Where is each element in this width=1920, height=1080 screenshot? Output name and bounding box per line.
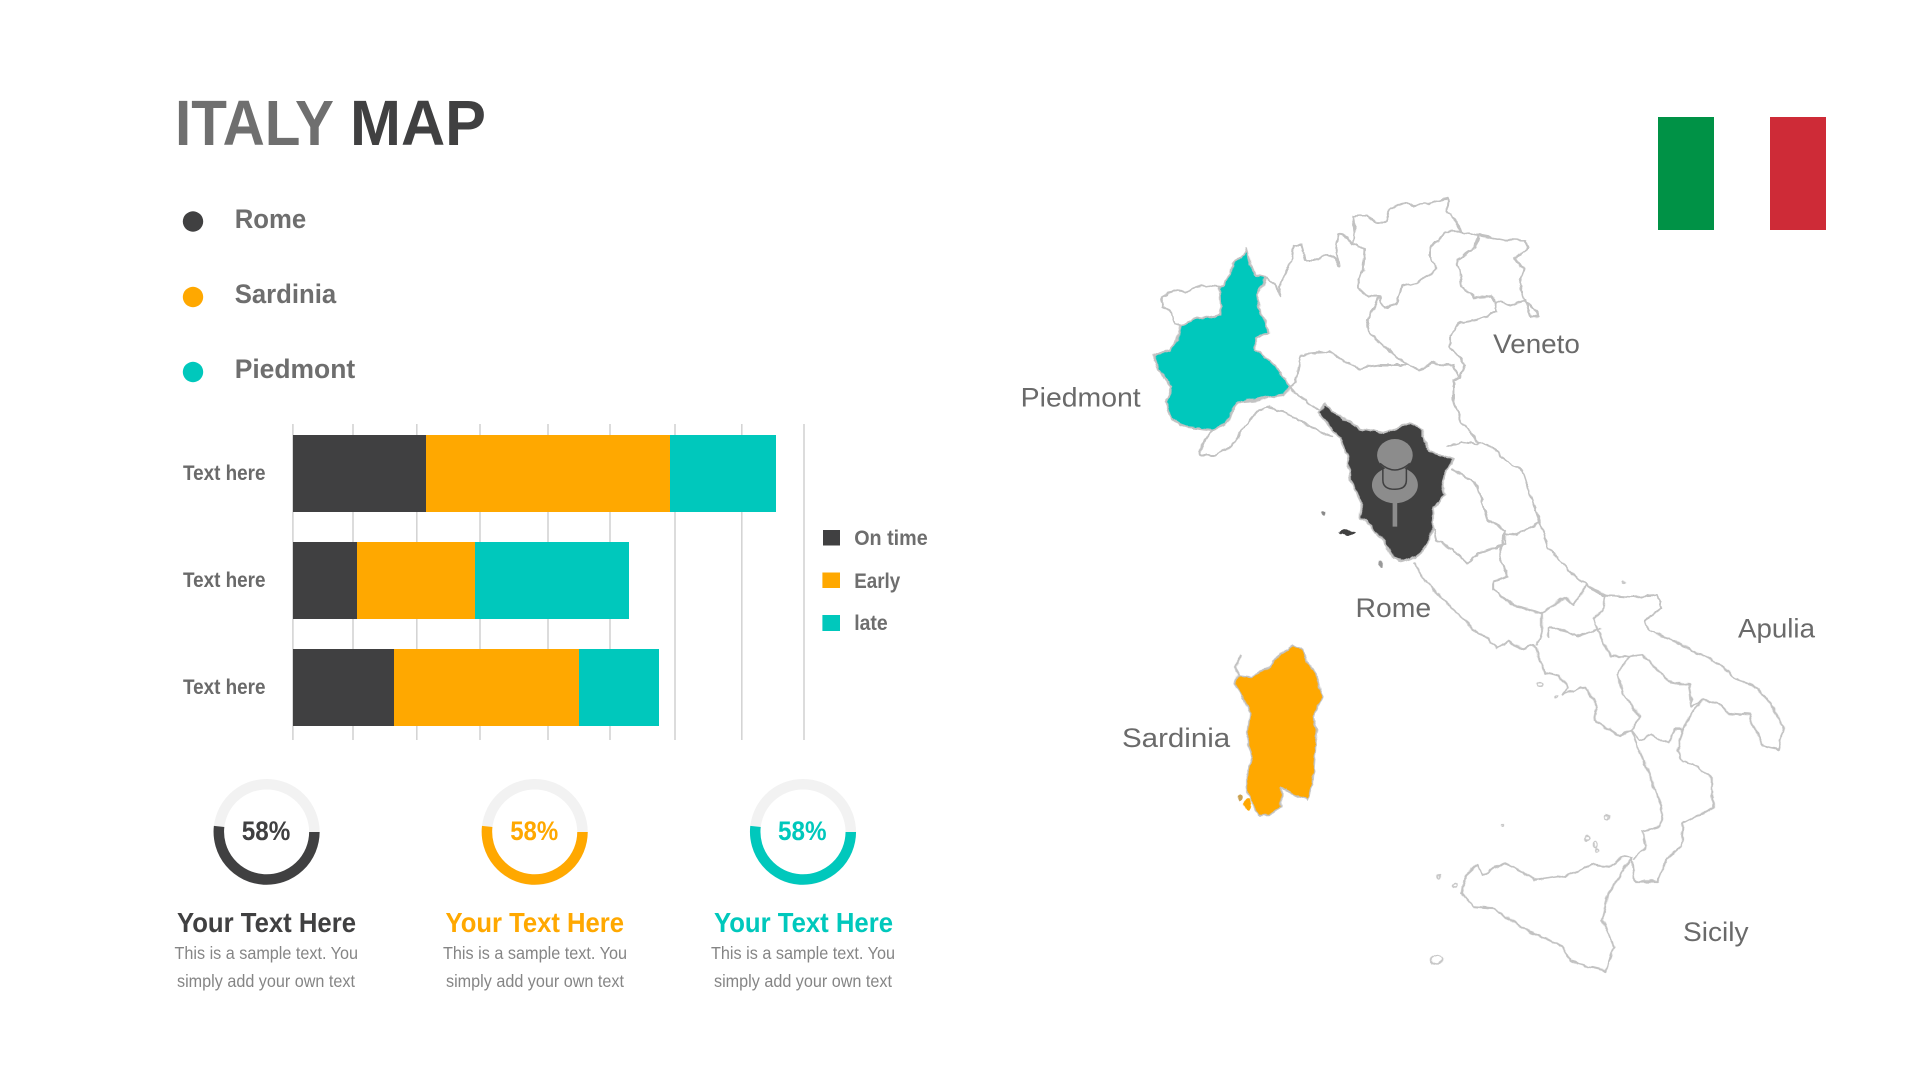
map labels: Sicily bbox=[1683, 917, 1749, 947]
stat: teal: Your Text Here bbox=[714, 907, 893, 938]
icon: push pin bbox=[1372, 439, 1418, 527]
legend item: Piedmont: Piedmont bbox=[235, 354, 355, 384]
donut dark bbox=[219, 784, 314, 880]
map labels bbox=[1021, 329, 1816, 947]
chart legend: On time bbox=[854, 527, 928, 550]
region outlines south bbox=[1413, 563, 1784, 971]
chart legend bbox=[822, 527, 928, 635]
bar row 3 bbox=[293, 649, 659, 726]
legend item: Piedmont bbox=[183, 354, 355, 384]
Sicily bbox=[1462, 857, 1631, 971]
icon: Italian flag bbox=[1658, 117, 1826, 230]
stat: orange: 58% bbox=[510, 816, 558, 846]
category labels: Text here bbox=[183, 676, 266, 699]
map labels: Piedmont bbox=[1021, 383, 1141, 413]
stat: dark: This is a sample text. You bbox=[174, 943, 358, 963]
region outlines north and centre bbox=[1162, 198, 1661, 620]
category labels bbox=[183, 462, 266, 699]
title: MAP bbox=[350, 87, 486, 159]
map labels: Sardinia bbox=[1122, 723, 1231, 753]
title bbox=[175, 87, 486, 159]
stat: dark bbox=[174, 784, 358, 991]
donut teal bbox=[755, 784, 851, 880]
map labels: Veneto bbox=[1493, 329, 1580, 359]
legend item: Rome: Rome bbox=[235, 204, 306, 234]
map of Italy bbox=[1154, 198, 1784, 971]
donut orange bbox=[487, 784, 582, 880]
stat: teal: simply add your own text bbox=[714, 971, 892, 991]
category labels: Text here bbox=[183, 462, 266, 485]
legend item: Rome bbox=[183, 204, 306, 234]
map regions bbox=[1154, 198, 1784, 971]
bar row 1 bbox=[293, 435, 776, 512]
stat: orange: Your Text Here bbox=[446, 907, 624, 938]
grid lines bbox=[293, 424, 804, 740]
legend item: Sardinia: Sardinia bbox=[235, 279, 337, 309]
region: Tuscany (Rome) bbox=[1319, 404, 1453, 567]
stat: teal: This is a sample text. You bbox=[711, 943, 895, 963]
map labels: Apulia bbox=[1738, 613, 1816, 643]
stacked bar chart bbox=[183, 424, 928, 740]
category labels: Text here bbox=[183, 569, 266, 592]
title: ITALY bbox=[175, 87, 334, 159]
stat: dark: Your Text Here bbox=[177, 907, 356, 938]
region: Piedmont bbox=[1154, 248, 1290, 430]
chart legend: late bbox=[854, 612, 888, 635]
region: Sardinia bbox=[1234, 645, 1323, 815]
stat: orange bbox=[443, 784, 627, 991]
chart legend: Early bbox=[854, 570, 900, 593]
stat: orange: simply add your own text bbox=[446, 971, 624, 991]
legend item: Sardinia bbox=[183, 279, 337, 309]
small islands bbox=[1430, 581, 1625, 964]
stat: dark: 58% bbox=[242, 816, 290, 846]
stat: teal: 58% bbox=[778, 816, 826, 846]
bar row 2 bbox=[293, 542, 629, 619]
stat: teal bbox=[711, 784, 895, 991]
map labels: Rome bbox=[1356, 593, 1431, 623]
stat: dark: simply add your own text bbox=[177, 971, 355, 991]
legend: regions bbox=[183, 204, 355, 384]
stat: orange: This is a sample text. You bbox=[443, 943, 627, 963]
